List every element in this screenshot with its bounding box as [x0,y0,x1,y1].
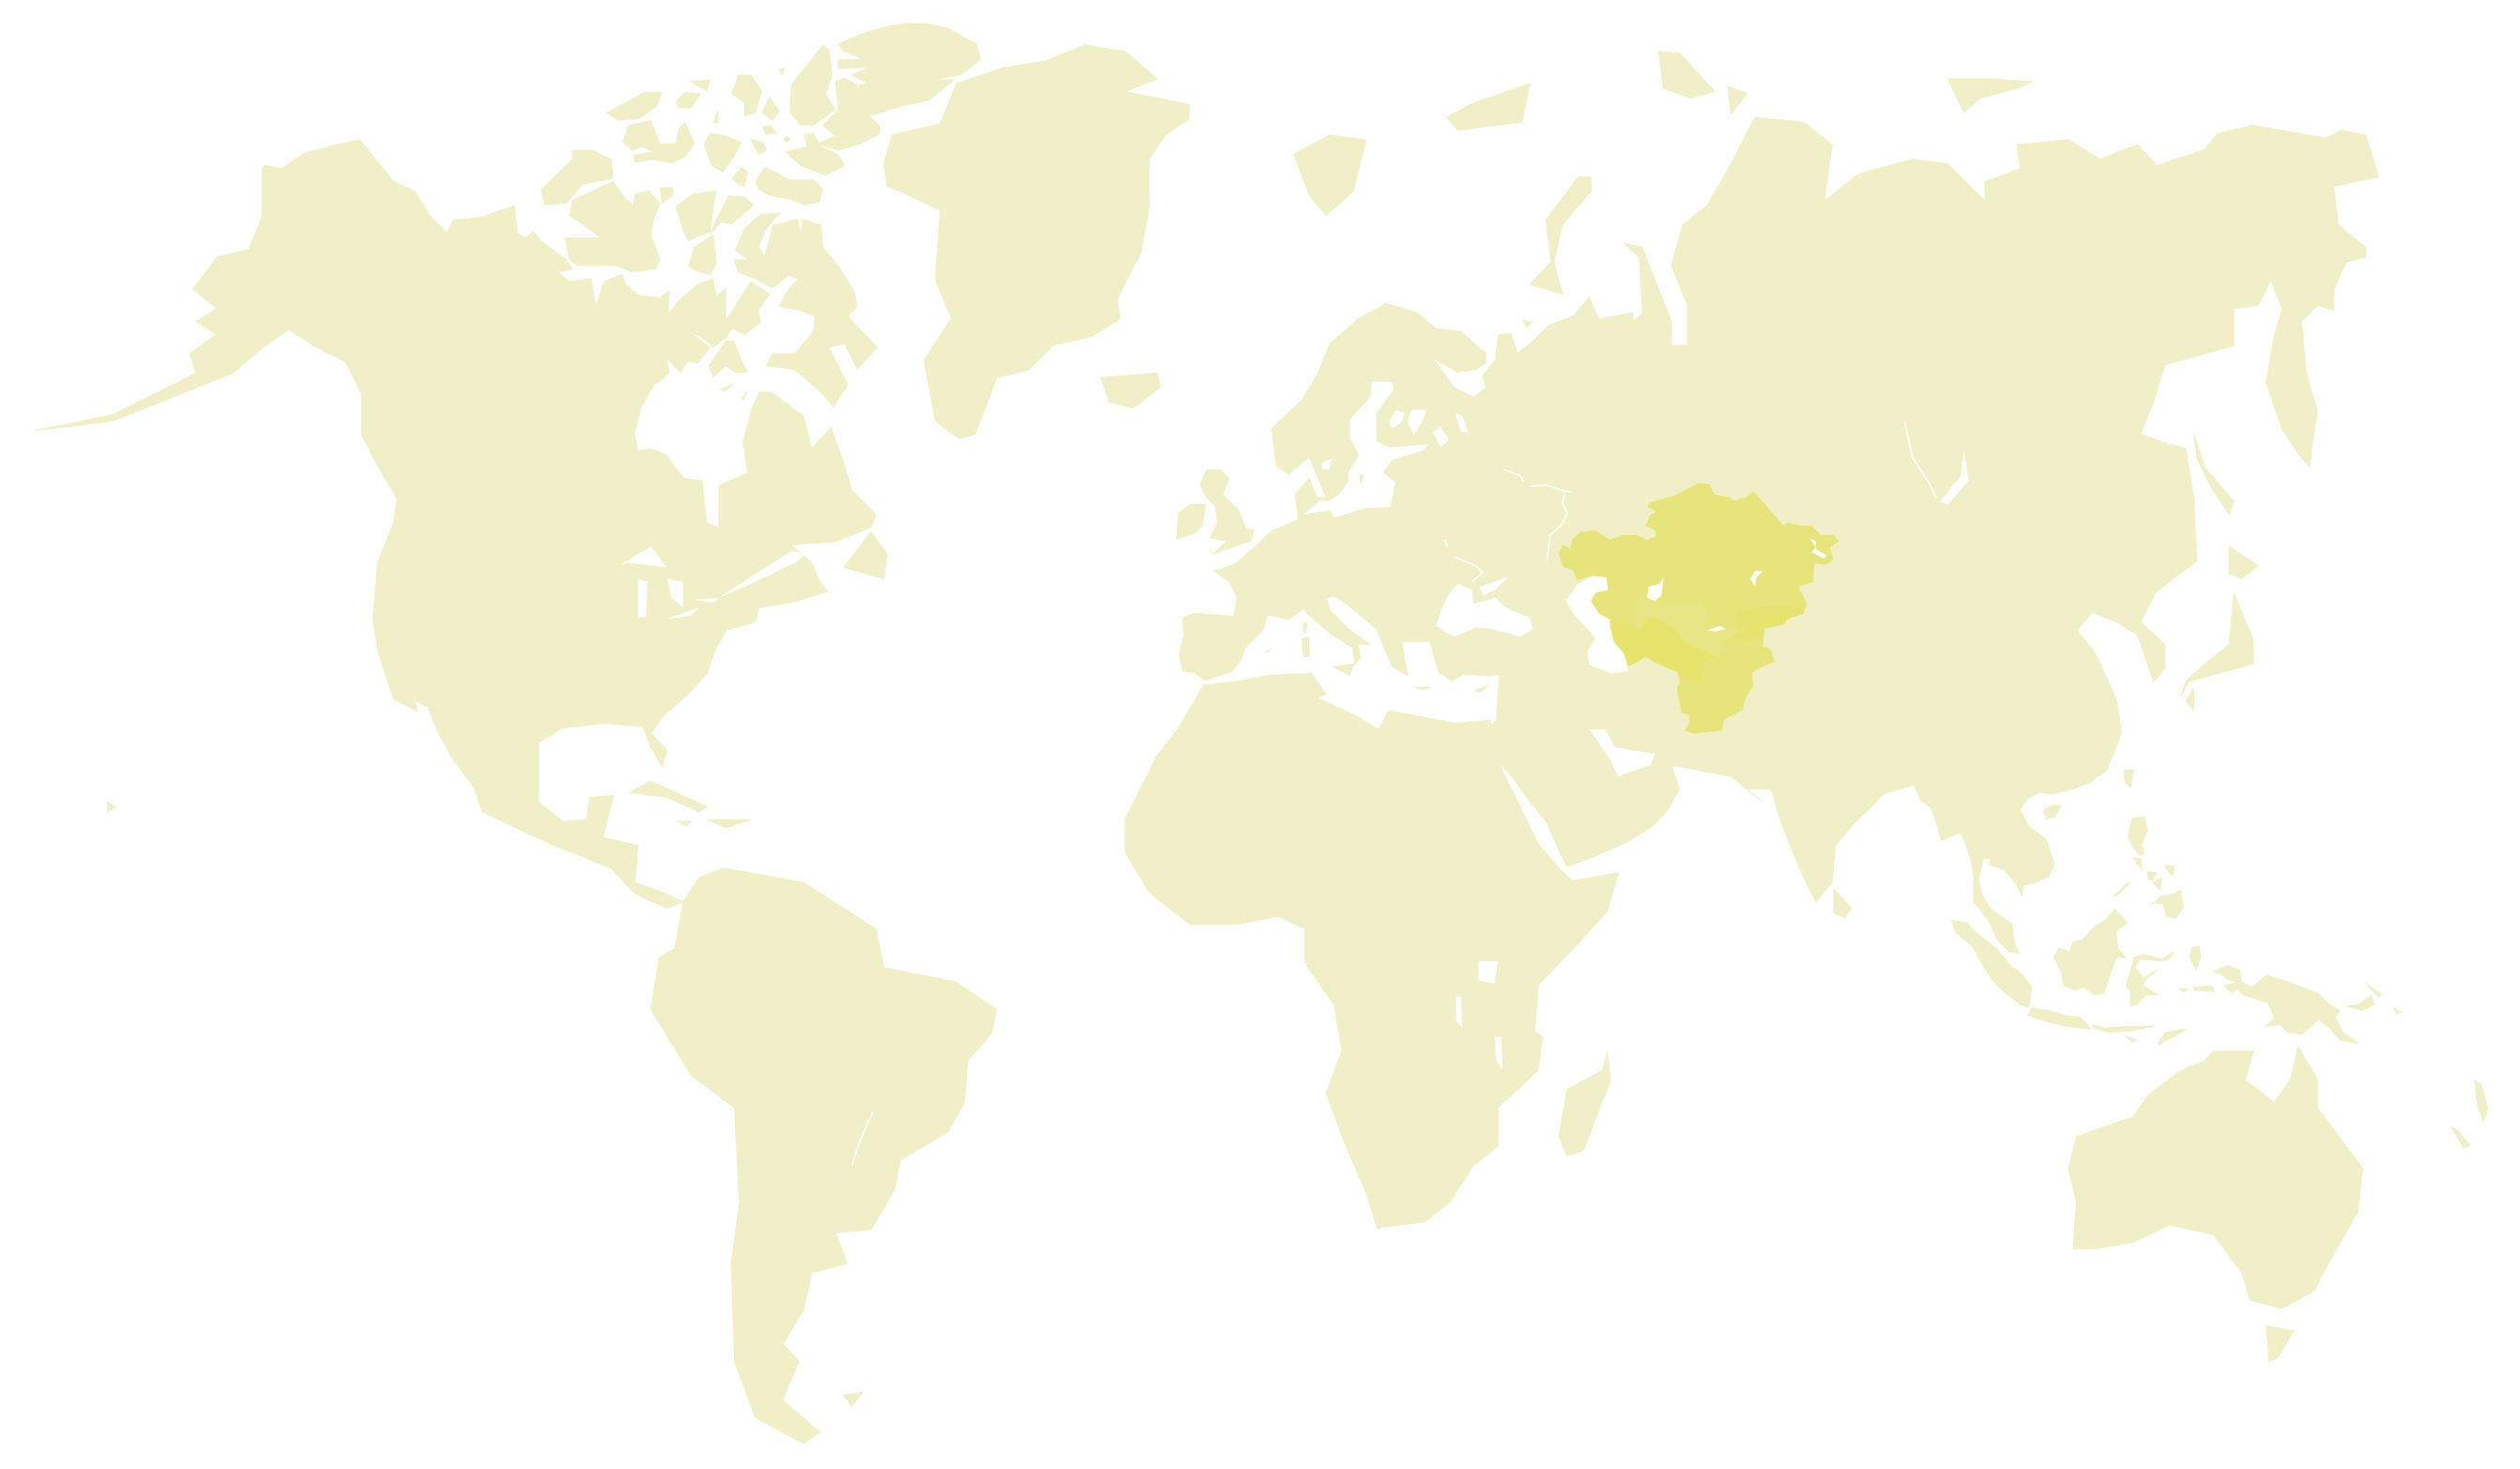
islands: Philippines [2114,817,2184,918]
island: Hainan [2043,804,2061,819]
Yenisei and Lena rivers [1904,421,1936,498]
island: Java [2027,1008,2091,1030]
island: Devon [786,133,845,176]
island: Southampton and Coats [709,341,748,401]
East African lakes [1456,961,1503,1069]
islands: Moluccas [2179,946,2215,992]
landmass: Australia [2069,1047,2362,1308]
island: Baffin [734,213,878,406]
landmass: South America [651,868,997,1444]
islands: Mediterranean [1264,622,1489,693]
islands: central Arctic [676,167,823,275]
island: Sulawesi [2126,951,2175,1006]
Persian Gulf [1590,729,1656,776]
island: Greenland [884,45,1189,438]
Caspian Sea [1565,575,1628,673]
Baltic Sea [1303,382,1428,518]
Arctic islands of Russia [1293,52,2033,294]
Scandinavian and Russian lakes [1321,410,1469,469]
island: Borneo [2054,909,2128,995]
islands: Japan and Sakhalin [2181,434,2258,711]
Gulf of California [415,701,450,785]
islands: Bismarck and Solomon [2346,983,2401,1015]
island: Tasmania [2266,1326,2294,1361]
landmass: Asia [1487,117,2378,953]
landmass: North and Central America [36,140,876,909]
Sea of Azov [1480,577,1508,596]
islands: New Zealand [2451,1080,2488,1148]
islands: Baltic and Arctic [1359,319,1533,485]
island: Great Britain [1199,469,1255,556]
island: Sri Lanka [1834,889,1852,918]
country: Uzbekistan [1636,594,1746,655]
landmass: Europe [1180,298,1633,688]
island: Newfoundland [844,532,887,578]
Volga and Dnieper rivers [1445,469,1572,582]
Southeast Asian islands [1951,770,2401,1045]
island: Ireland [1176,504,1206,540]
water: European seas and lakes [1303,382,1572,636]
island: Axel Heiberg [790,45,835,125]
Caribbean and Pacific islands [108,781,863,1406]
island: Iceland [1101,373,1160,408]
Hudson Bay [634,370,758,528]
islands: Lesser Sunda [2093,1025,2187,1045]
country: Turkmenistan [1610,617,1716,682]
Black Sea [1436,584,1533,636]
Arctic Archipelago of Canada [526,23,981,413]
island: New Guinea [2213,965,2359,1044]
islands: western Queen Elizabeth group [607,68,790,204]
island: Victoria [565,181,660,272]
European islands [1176,319,1533,693]
island: Ellesmere [817,23,981,150]
mainland north coast [526,232,770,413]
water: inland seas, bays and lakes [415,370,1969,1165]
highlighted region: Central Asia [1559,482,1839,734]
country: Kyrgyzstan [1733,607,1804,640]
countries: Kazakhstan and neighbours base [1559,482,1839,734]
South America lakes and rivers [852,1112,873,1165]
island: Madagascar [1559,1051,1611,1155]
island: Taiwan [2124,770,2133,788]
island: Sumatra [1951,920,2032,1007]
landmass: Africa [1125,673,1618,1228]
lakes: Aral, Balkhash, Zaysan, Issyk-Kul [1647,538,1827,632]
Great Lakes and St Lawrence [619,546,807,619]
Lake Baikal [1940,450,1969,505]
island: Banks [542,150,613,205]
